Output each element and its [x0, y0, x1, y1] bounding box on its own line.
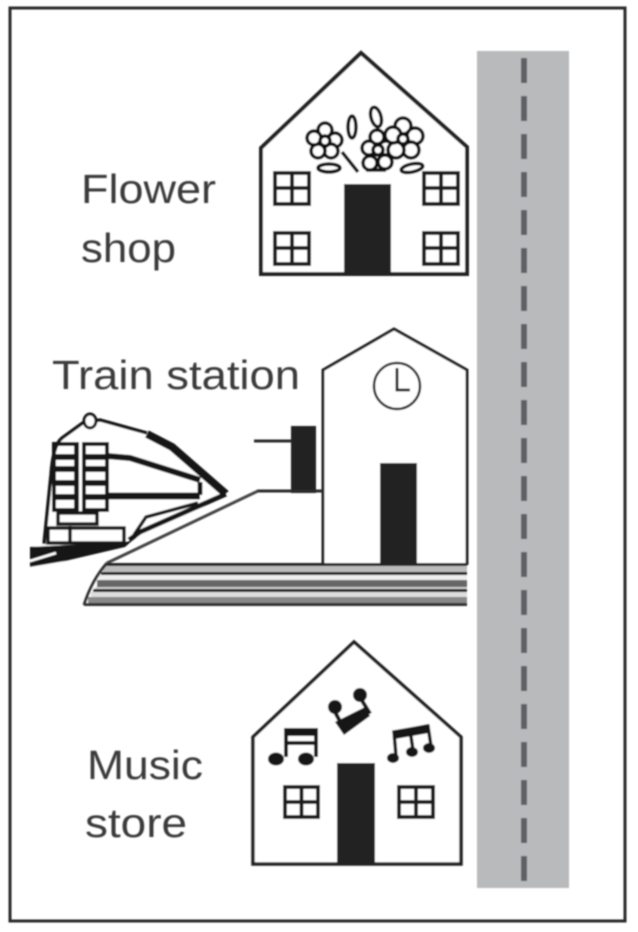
music store building — [253, 642, 461, 865]
platform tracks — [84, 563, 467, 606]
door — [380, 463, 417, 565]
label: Music store: store — [85, 800, 187, 846]
train station building — [107, 329, 467, 565]
label: Music store — [85, 742, 203, 846]
flower shop building — [261, 53, 467, 274]
icon: flowers — [307, 106, 424, 174]
door — [337, 763, 375, 865]
label: Music store: Music — [87, 742, 203, 788]
label: Flower shop: shop — [81, 225, 176, 271]
windows — [275, 173, 458, 264]
label: Train station: Train station — [52, 352, 300, 398]
windows — [285, 787, 433, 817]
icon: train — [30, 414, 228, 568]
icon: music notes — [268, 688, 435, 766]
door — [344, 184, 391, 274]
label: Flower shop — [81, 166, 216, 271]
road — [477, 51, 569, 888]
ramp — [107, 491, 258, 563]
icon: clock — [374, 363, 420, 409]
small platform building — [254, 426, 323, 493]
label: Flower shop: Flower — [81, 166, 216, 212]
